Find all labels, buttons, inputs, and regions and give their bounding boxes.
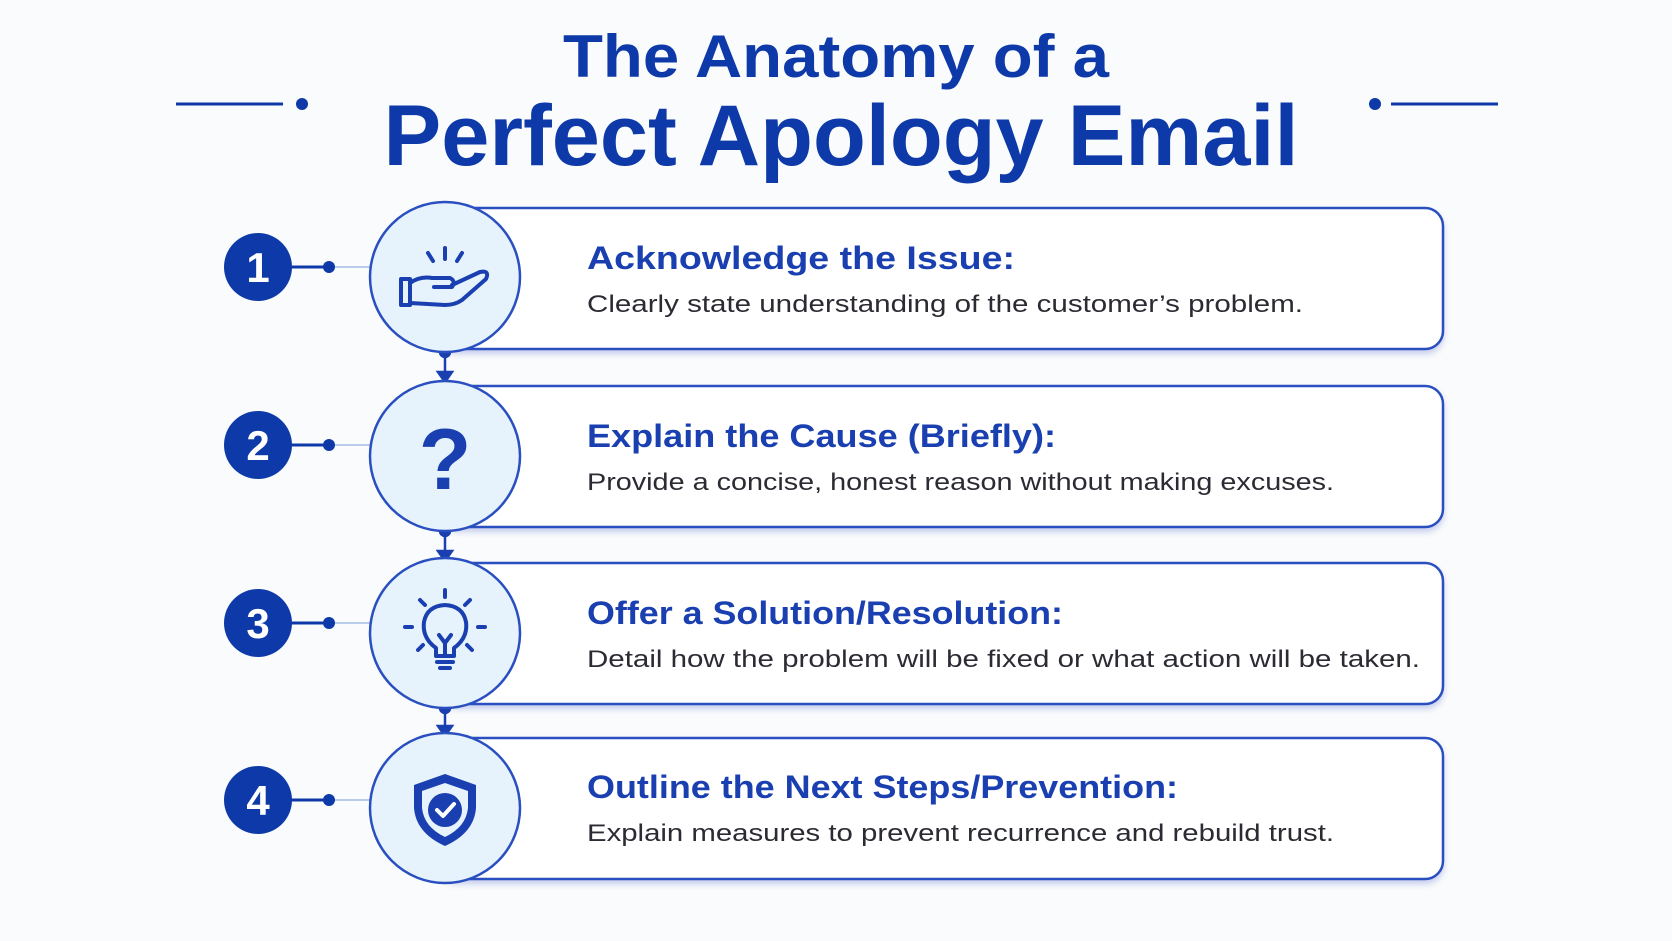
arrows between steps — [438, 347, 452, 736]
title: The Anatomy of a — [563, 23, 1110, 90]
text 2: Explain the Cause (Briefly): — [587, 418, 1056, 454]
text 2: Provide a concise, honest reason without making excuses. — [587, 469, 1334, 496]
badge 2: 2 — [246, 422, 270, 469]
text 3 — [587, 595, 1420, 673]
text 3: Detail how the problem will be fixed or what action will be taken. — [587, 646, 1420, 673]
card 1 — [440, 208, 1443, 349]
text 3: Offer a Solution/Resolution: — [587, 595, 1063, 631]
text 1 — [587, 240, 1303, 318]
icon: lightbulb — [370, 558, 520, 708]
step 1 — [224, 202, 1443, 352]
badge 1: 1 — [246, 244, 270, 291]
icon: shield — [370, 733, 520, 883]
card 4 — [440, 738, 1443, 879]
badge 3 — [224, 589, 372, 657]
title: Perfect Apology Email — [384, 88, 1298, 184]
step 4 — [224, 733, 1443, 883]
step 3 — [224, 558, 1443, 708]
icon: hand circle — [370, 202, 520, 352]
card 3 — [440, 563, 1443, 704]
title — [384, 23, 1298, 184]
card 2 — [440, 386, 1443, 527]
badge 2 — [224, 411, 372, 479]
badge 1 — [224, 233, 372, 301]
badge 4 — [224, 766, 372, 834]
step 2 — [224, 381, 1443, 531]
text 4: Explain measures to prevent recurrence and rebuild trust. — [587, 820, 1334, 847]
text 1: Clearly state understanding of the customer’s problem. — [587, 291, 1303, 318]
text 4 — [587, 769, 1334, 847]
text 1: Acknowledge the Issue: — [587, 240, 1015, 276]
text 4: Outline the Next Steps/Prevention: — [587, 769, 1178, 805]
icon: question: ? — [419, 412, 471, 508]
badge 4: 4 — [246, 777, 270, 824]
icon: question — [370, 381, 520, 531]
text 2 — [587, 418, 1334, 496]
badge 3: 3 — [246, 600, 270, 647]
